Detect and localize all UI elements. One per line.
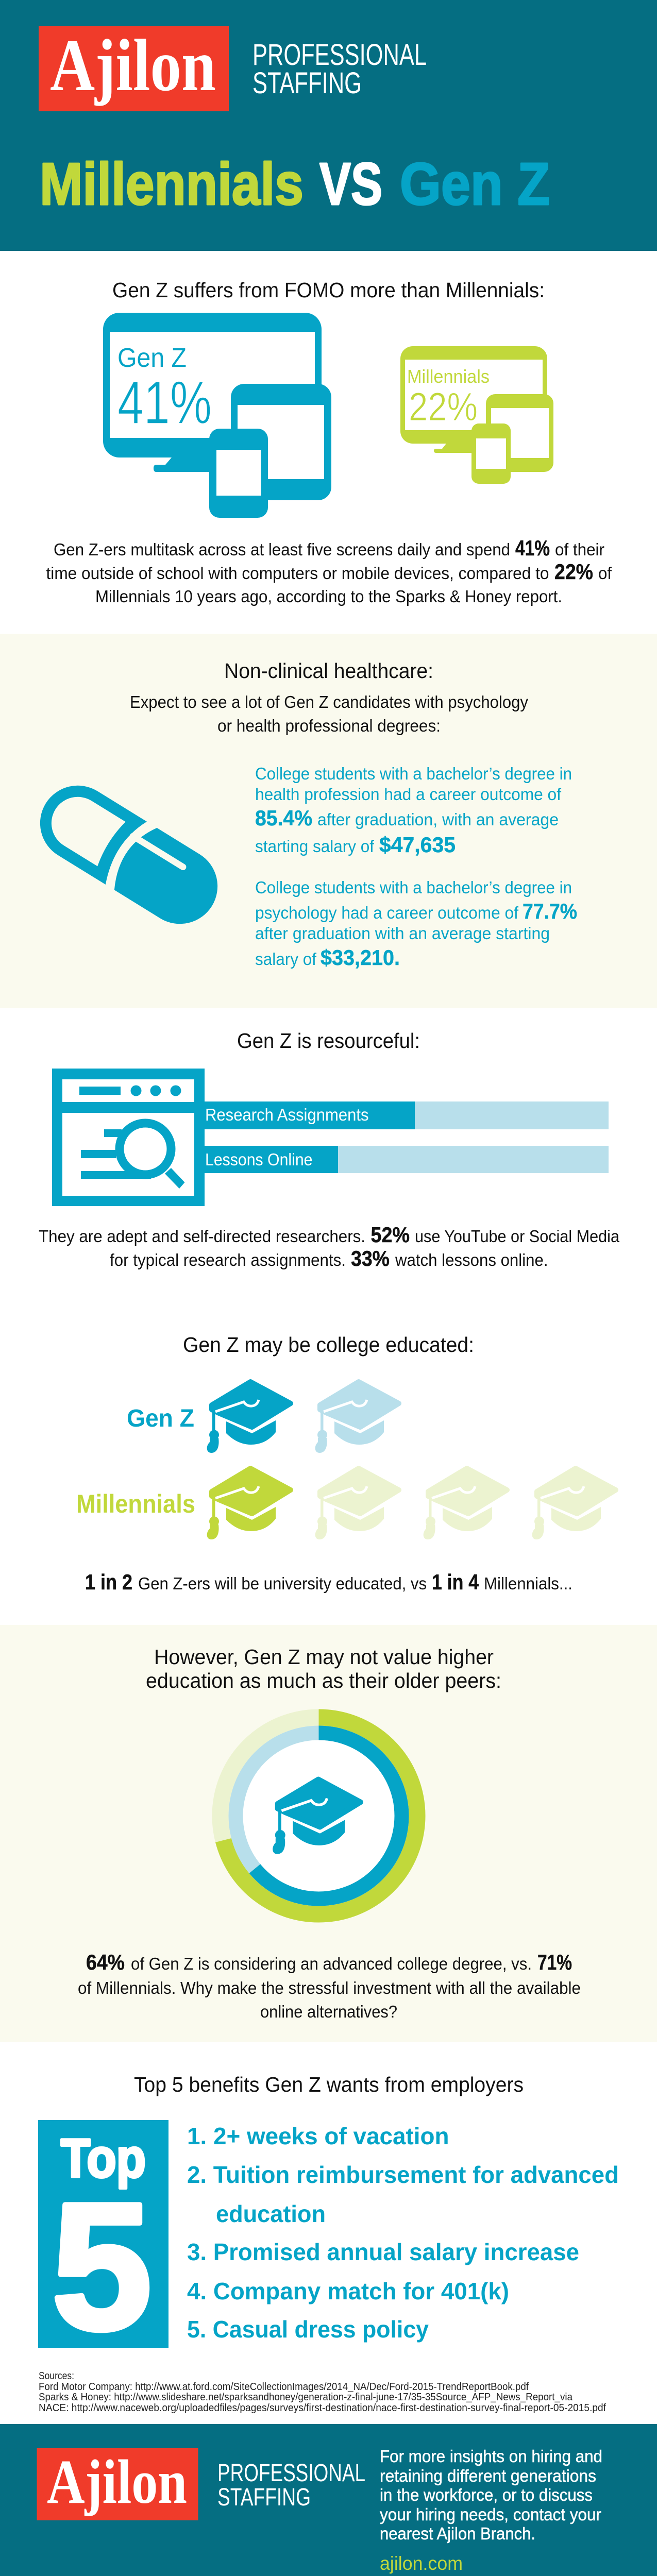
text: multitask paragraph: 22%	[554, 560, 593, 584]
badge: Top 5: 5	[52, 2166, 152, 2367]
text: call to action: For more insights on hiring and	[380, 2447, 602, 2466]
text: 1 in 2 vs 1 in 4: 1 in 2	[85, 1570, 132, 1594]
text: multitask paragraph: 41%	[515, 536, 550, 560]
logo: Ajilon footer: Ajilon	[47, 2447, 187, 2517]
text: psychology outcome: psychology had a career outcome of	[255, 903, 519, 922]
text: multitask paragraph: of	[598, 564, 612, 583]
text: advanced degree paragraph: 64%	[86, 1950, 125, 1974]
text: researchers paragraph: They are adept and self-directed researchers.	[39, 1227, 365, 1246]
text: sources	[39, 2370, 606, 2414]
chart: donut 71% Millennials, 64% Gen Z	[221, 1718, 417, 1914]
text: advanced degree paragraph: online alternatives?	[260, 2002, 397, 2021]
logo subtitle: PROFESSIONAL	[252, 38, 427, 72]
icon: Gen Z devices 41%: 41%	[117, 369, 212, 437]
icon: Millennials devices 22%: Millennials	[407, 366, 490, 387]
icon: browser with magnifier	[52, 1069, 205, 1206]
text: advanced degree paragraph: of Millennials. Why make the stressful investment with all the available	[78, 1978, 581, 1997]
text: multitask paragraph	[46, 536, 612, 606]
text: advanced degree paragraph	[78, 1950, 581, 2021]
text: health profession outcome: starting salary of	[255, 837, 375, 856]
text: psychology outcome: salary of	[255, 950, 317, 969]
text: multitask paragraph: Gen Z-ers multitask across at least five screens daily and spend	[54, 540, 510, 559]
text: researchers paragraph: use YouTube or Social Media	[415, 1227, 620, 1246]
text: 1 in 2 vs 1 in 4: Gen Z-ers will be university educated, vs	[138, 1574, 427, 1593]
logo subtitle	[252, 38, 427, 100]
text: call to action: retaining different generations	[380, 2466, 596, 2485]
logo subtitle: STAFFING	[252, 66, 362, 100]
text: call to action: your hiring needs, contact your	[380, 2505, 601, 2524]
list: benefits: education	[216, 2200, 326, 2227]
logo subtitle footer	[217, 2460, 365, 2511]
subheading: healthcare: Expect to see a lot of Gen Z candidates with psychology	[130, 692, 528, 711]
text: psychology outcome: 77.7%	[523, 899, 577, 923]
panel: resourceful	[39, 1029, 620, 1270]
text: researchers paragraph: for typical research assignments.	[110, 1250, 346, 1269]
text: advanced degree paragraph: of Gen Z is considering an advanced college degree, vs.	[131, 1954, 532, 1973]
icon: pill	[26, 771, 232, 938]
text: call to action: nearest Ajilon Branch.	[380, 2524, 535, 2543]
title: Gen Z	[400, 150, 550, 217]
panel: higher education value	[0, 1625, 657, 2042]
list: benefits: 1. 2+ weeks of vacation	[187, 2123, 449, 2149]
heading: higher education	[146, 1645, 501, 1692]
heading: higher education: However, Gen Z may not value higher	[154, 1645, 494, 1669]
text: 1 in 2 vs 1 in 4	[85, 1570, 572, 1594]
label: Gen Z: Gen Z	[127, 1405, 194, 1432]
heading: FOMO: Gen Z suffers from FOMO more than Millennials:	[112, 278, 545, 302]
bar: research assignments 52%	[205, 1101, 609, 1129]
title	[40, 150, 550, 217]
list: benefits: 5. Casual dress policy	[187, 2316, 429, 2343]
text: psychology outcome: after graduation with an average starting	[255, 924, 550, 943]
text: advanced degree paragraph: 71%	[537, 1950, 572, 1974]
heading: resourceful: Gen Z is resourceful:	[237, 1029, 420, 1053]
heading: higher education: education as much as their older peers:	[146, 1669, 501, 1692]
panel: header	[0, 0, 657, 251]
text: sources: Sparks & Honey: http://www.slideshare.net/sparksandhoney/generation-z-final-june-17/35-35Source_AFP_News_Report_via	[39, 2392, 573, 2403]
label: Millennials: Millennials	[76, 1489, 195, 1518]
logo subtitle footer: STAFFING	[217, 2484, 311, 2511]
text: researchers paragraph: 33%	[351, 1246, 390, 1270]
badge: Top 5: Top	[61, 2128, 146, 2189]
text: researchers paragraph: watch lessons online.	[395, 1250, 548, 1269]
subheading: healthcare	[130, 692, 528, 735]
heading: top 5 benefits: Top 5 benefits Gen Z wants from employers	[134, 2073, 524, 2096]
bar: lessons online 33%: Lessons Online	[205, 1150, 312, 1169]
text: health profession outcome: $47,635	[379, 833, 456, 857]
list: benefits	[187, 2123, 619, 2343]
text: researchers paragraph: 52%	[371, 1223, 410, 1247]
panel: top 5 benefits	[38, 2073, 619, 2367]
icon: Gen Z devices 41%: Gen Z	[117, 343, 187, 373]
icon: Millennials caps, 1 of 4	[207, 1468, 616, 1539]
text: 1 in 2 vs 1 in 4: Millennials...	[484, 1574, 572, 1593]
text: call to action: in the workforce, or to discuss	[380, 2485, 593, 2504]
text: psychology outcome: College students with a bachelor’s degree in	[255, 878, 572, 897]
text: sources: Ford Motor Company: http://www.at.ford.com/SiteCollectionImages/2014_NA/Dec/Ford-2015-TrendReportBook.pdf	[39, 2381, 529, 2393]
text: sources: NACE: http://www.naceweb.org/uploadedfiles/pages/surveys/first-destination/nace-first-destination-survey-final-report-05-2015.pdf	[39, 2402, 606, 2414]
panel: non-clinical healthcare	[0, 634, 657, 1008]
icon: Gen Z caps, 1 of 2	[207, 1382, 399, 1453]
text: health profession outcome: College students with a bachelor’s degree in	[255, 764, 572, 783]
text: psychology outcome	[255, 878, 577, 970]
title: VS	[319, 150, 382, 217]
text: multitask paragraph: of their	[555, 540, 604, 559]
bar: lessons online 33%	[205, 1146, 609, 1173]
icon: Gen Z devices 41%	[103, 313, 331, 518]
bar: research assignments 52%: Research Assignments	[205, 1105, 369, 1124]
text: 1 in 2 vs 1 in 4: 1 in 4	[432, 1570, 479, 1594]
list: benefits: 4. Company match for 401(k)	[187, 2278, 509, 2304]
title: Millennials	[40, 150, 304, 217]
icon: Millennials devices 22%: 22%	[409, 385, 478, 429]
text: researchers paragraph	[39, 1223, 620, 1270]
panel: college educated	[76, 1333, 616, 1594]
text: multitask paragraph: time outside of school with computers or mobile devices, compared to	[46, 564, 549, 583]
text: health profession outcome: health profession had a career outcome of	[255, 785, 562, 804]
logo: Ajilon: Ajilon	[50, 25, 216, 107]
heading: college educated: Gen Z may be college educated:	[183, 1333, 474, 1357]
text: call to action	[380, 2447, 602, 2543]
text: psychology outcome: $33,210.	[321, 945, 400, 970]
panel: footer	[0, 2424, 657, 2576]
text: health profession outcome	[255, 764, 572, 857]
list: benefits: 2. Tuition reimbursement for advanced	[187, 2161, 619, 2188]
text: website: ajilon.com	[380, 2553, 463, 2574]
panel: FOMO	[46, 278, 612, 606]
text: health profession outcome: after graduation, with an average	[317, 810, 559, 829]
text: sources: Sources:	[39, 2370, 74, 2382]
list: benefits: 3. Promised annual salary increase	[187, 2239, 579, 2265]
logo subtitle footer: PROFESSIONAL	[217, 2460, 365, 2487]
icon: graduation cap	[273, 1780, 361, 1854]
icon: Millennials devices 22%	[400, 346, 553, 484]
heading: healthcare: Non-clinical healthcare:	[224, 659, 433, 683]
subheading: healthcare: or health professional degrees:	[217, 716, 441, 735]
badge: Top 5	[38, 2120, 169, 2367]
text: health profession outcome: 85.4%	[255, 806, 312, 830]
text: multitask paragraph: Millennials 10 years ago, according to the Sparks & Honey report.	[95, 587, 562, 606]
